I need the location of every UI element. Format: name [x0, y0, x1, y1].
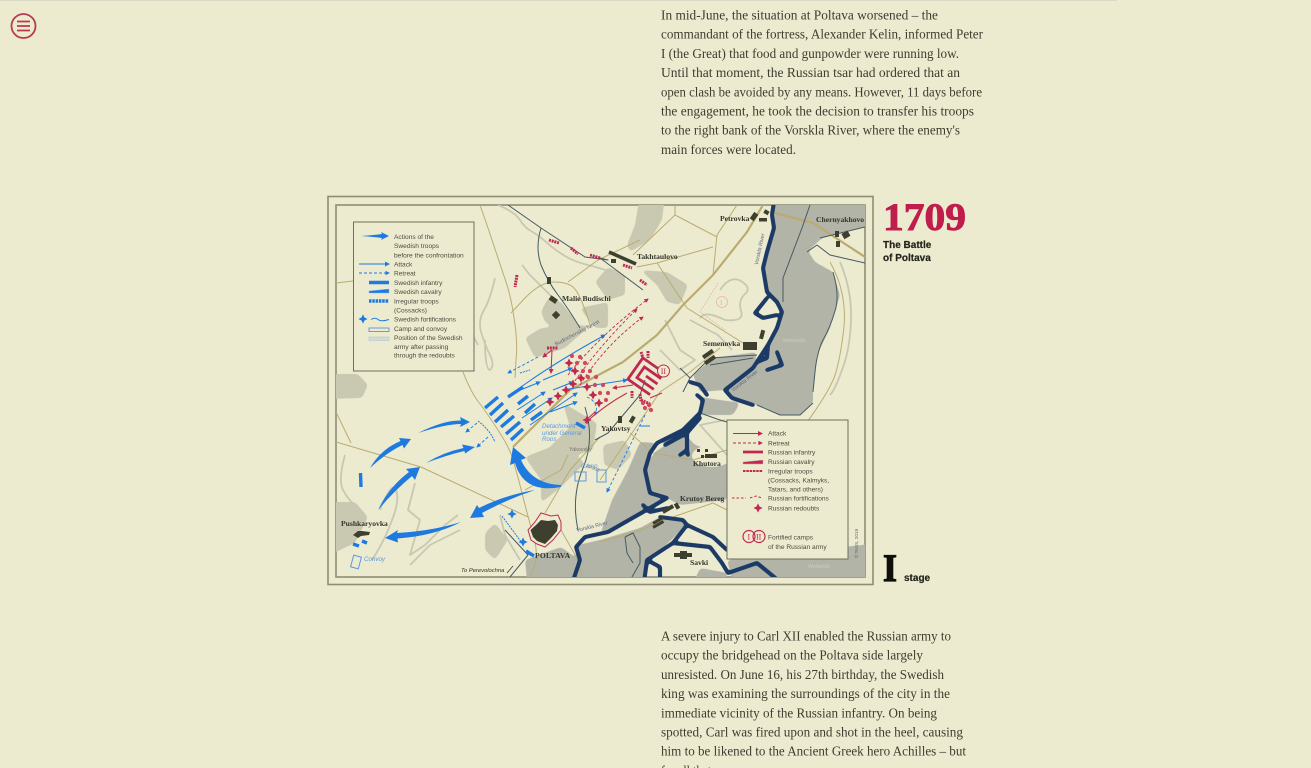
legend: Swedish troops: Camp and convoy — [394, 326, 448, 333]
legend: Russian troops: Russian cavalry — [768, 459, 815, 466]
Swedish troop movements — [351, 335, 650, 569]
Swedish map labels: Convoy — [364, 556, 386, 563]
legend: Russian troops: (Cossacks, Kalmyks, — [768, 478, 829, 484]
village: Krutoy Bereg: Krutoy Bereg — [680, 494, 725, 503]
Russian positions — [515, 240, 728, 425]
text block: intro paragraph: main forces were located. — [661, 143, 796, 158]
village: Pushkaryovka — [341, 519, 388, 538]
text block: second paragraph: A severe injury to Carl XII enabled the Russian army to — [661, 630, 951, 644]
legend samples: Russian: I — [748, 532, 750, 542]
river and terrain labels: Vorskla River — [731, 369, 759, 394]
legend: Russian troops — [727, 420, 848, 559]
river and terrain labels: forest — [585, 463, 601, 474]
village: Semenovka — [702, 330, 765, 365]
legend: Russian troops: Russian infantry — [768, 450, 816, 456]
map credit: © TASS, 2019 — [853, 529, 859, 558]
village: Petrovka: Petrovka — [720, 214, 750, 223]
river and terrain labels — [554, 233, 831, 570]
text block: second paragraph: spotted, Carl was fired upon and shot in the heel, causing — [661, 726, 963, 740]
village: Petrovka — [720, 209, 770, 223]
Russian irregular and fort marks — [515, 240, 650, 404]
village: Khutora: Khutora — [693, 459, 721, 468]
village: Savki — [674, 551, 708, 567]
river and terrain labels: Vorskla River — [576, 520, 608, 534]
Russian camp I outline: I — [720, 298, 723, 307]
Swedish map labels: Roos — [542, 436, 556, 443]
village: Savki: Savki — [690, 558, 708, 567]
Russian retreat and attack arrows — [543, 299, 662, 423]
village: Malie Budischi — [547, 277, 611, 319]
legend: Russian troops: Fortified camps — [768, 534, 814, 542]
heading: 1709 The Battle of Poltava — [883, 196, 966, 264]
text block: intro paragraph: I (the Great) that food and gunpowder were running low. — [661, 47, 959, 62]
contour lines — [341, 205, 851, 565]
village: Krutoy Bereg — [652, 494, 725, 529]
Swedish map labels: Detachment — [542, 423, 576, 430]
village: Takhtaulovo: Takhtaulovo — [637, 252, 678, 261]
villages — [341, 209, 864, 567]
legend: Swedish troops — [354, 222, 474, 371]
village: Yakovtsy: Yakovtsy — [601, 424, 631, 433]
legend: Swedish troops: through the redoubts — [394, 352, 456, 360]
text block: second paragraph: unresisted. On June 16, his 27th birthday, the Swedish — [661, 668, 944, 683]
city: Poltava: POLTAVA — [535, 551, 571, 560]
text block: intro paragraph: the engagement, he took the decision to transfer his troops — [661, 104, 974, 120]
city: Poltava — [528, 513, 571, 560]
river and terrain labels: Yakovsky — [569, 447, 592, 453]
Swedish camp and convoy — [351, 470, 606, 569]
legend samples: Russian — [732, 434, 765, 542]
legend: Swedish troops: Actions of the — [394, 234, 434, 241]
hills — [325, 195, 688, 560]
legend: Swedish troops: Swedish troops — [394, 243, 440, 250]
legend samples: Russian: II — [756, 532, 762, 542]
legend: Russian troops: of the Russian army — [768, 544, 827, 551]
text block: intro paragraph — [661, 8, 983, 158]
village: Takhtaulovo — [609, 252, 678, 264]
Swedish map labels: under General — [542, 430, 582, 437]
text block: second paragraph: immediate vicinity of the Russian infantry. On being — [661, 706, 937, 721]
legend: Swedish troops: Retreat — [394, 270, 416, 278]
text block: intro paragraph: to the right bank of the Vorskla River, where the enemy's — [661, 124, 960, 139]
Russian camp II — [628, 358, 670, 395]
icon: menu button — [12, 14, 36, 38]
river and terrain labels: Wetlands — [808, 564, 831, 570]
village: Chernyakhovo: Chernyakhovo — [816, 215, 864, 224]
village: Semenovka: Semenovka — [703, 339, 740, 348]
heading: 1709 The Battle of Poltava: of Poltava — [883, 253, 931, 264]
streams — [505, 205, 865, 577]
river and terrain labels: Wetlands — [783, 338, 806, 344]
river and terrain labels: Vorskla River — [754, 233, 767, 265]
Swedish redoubt marks — [507, 509, 528, 547]
wetlands — [525, 195, 880, 590]
legend: Swedish troops: Swedish fortifications — [394, 316, 457, 324]
text block: intro paragraph: commandant of the fortress, Alexander Kelin, informed Peter — [661, 28, 983, 43]
legend: Russian troops: Russian fortifications — [768, 496, 830, 502]
stage marker: I stage: I — [883, 547, 897, 590]
text block: second paragraph: king was examining the surroundings of the city in the — [661, 687, 950, 702]
Swedish infantry bars — [353, 387, 585, 556]
legend: Russian troops: Irregular troops — [768, 468, 813, 476]
legend: Swedish troops: Swedish cavalry — [394, 289, 442, 296]
text block: second paragraph: him to be likened to the Ancient Greek hero Achilles – but — [661, 745, 966, 760]
legend: Russian troops: Retreat — [768, 440, 790, 448]
text block: intro paragraph: Until that moment, the Russian tsar had ordered that an — [661, 66, 960, 81]
stage marker: I stage — [883, 547, 931, 590]
text block: intro paragraph: open clash be avoided by any means. However, 11 days before — [661, 85, 982, 100]
legend: Swedish troops: before the confrontation — [394, 252, 464, 260]
village: Pushkaryovka: Pushkaryovka — [341, 519, 388, 528]
legend: Swedish troops: Swedish infantry — [394, 280, 443, 287]
roads — [336, 205, 865, 577]
Swedish map labels — [364, 423, 598, 563]
top rule — [0, 0, 1117, 1]
Russian small detachments — [570, 354, 653, 412]
stage marker: I stage: stage — [904, 573, 931, 584]
village: Yakovtsy — [601, 416, 636, 433]
legend: Russian troops: Russian redoubts — [768, 506, 820, 512]
legend: Swedish troops: Attack — [394, 262, 413, 268]
legend: Russian troops: Tatars, and others) — [768, 486, 823, 494]
legend: Swedish troops: (Cossacks) — [394, 308, 427, 314]
Swedish attack arrows — [466, 335, 650, 543]
text block: second paragraph — [661, 630, 966, 768]
legend: Swedish troops: Position of the Swedish — [394, 335, 463, 342]
Russian redoubts — [545, 358, 604, 425]
map: Battle of Poltava, stage I — [325, 195, 880, 590]
heading: 1709 The Battle of Poltava: The Battle — [883, 240, 932, 251]
village: Chernyakhovo — [816, 215, 864, 247]
rivers — [570, 195, 790, 590]
map terrain — [336, 205, 865, 577]
legend: Russian troops: Attack — [768, 430, 787, 438]
cream clearing at Khutora — [692, 447, 726, 467]
Russian camp II: II — [661, 367, 666, 376]
Swedish map labels: Camp — [581, 463, 598, 470]
text block: second paragraph: occupy the bridgehead on the Poltava side largely — [661, 649, 923, 664]
village: Malie Budischi: Malie Budischi — [562, 294, 611, 303]
river and terrain labels: Budischenskiy forest — [554, 319, 601, 348]
label: To Perevolochna — [461, 566, 513, 574]
village: Khutora — [693, 449, 721, 468]
label: To Perevolochna: To Perevolochna — [461, 568, 505, 574]
legend: Swedish troops: Irregular troops — [394, 298, 439, 306]
large blue arrows — [370, 417, 561, 542]
legend: Swedish troops: army after passing — [394, 344, 449, 351]
heading: 1709 The Battle of Poltava: 1709 — [883, 196, 966, 239]
Russian camp I outline — [700, 283, 728, 330]
text block: intro paragraph: In mid-June, the situation at Poltava worsened – the — [661, 8, 938, 24]
legend samples: Swedish — [358, 232, 389, 340]
map frame — [328, 196, 873, 584]
